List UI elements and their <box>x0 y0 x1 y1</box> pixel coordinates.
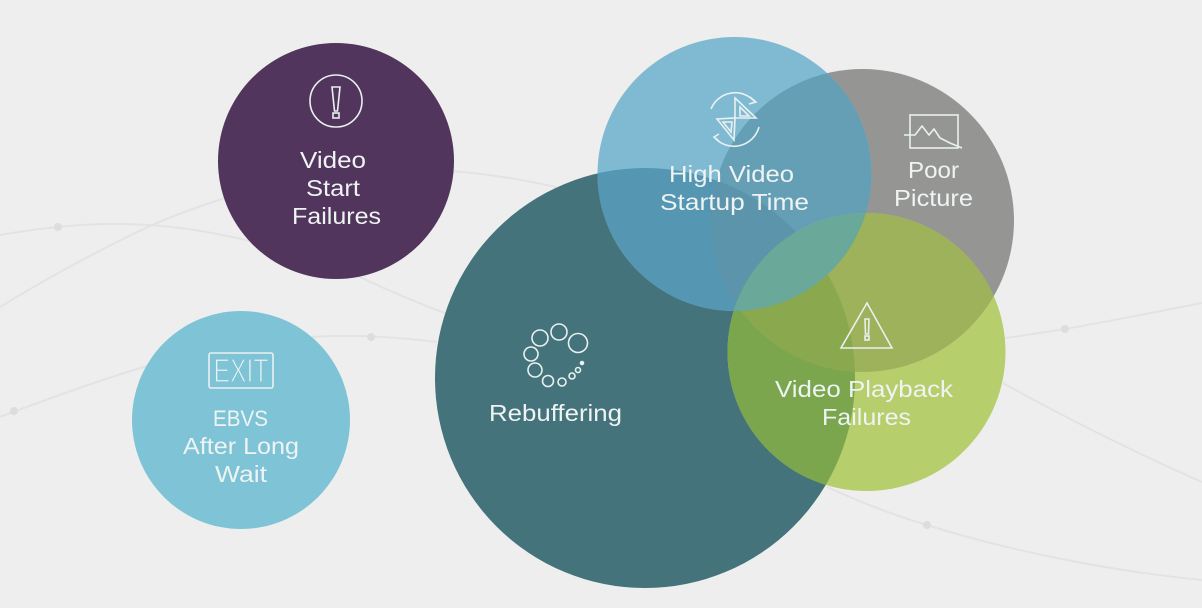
panel: poor picture <box>711 69 1014 372</box>
label: EBVS after long wait <box>183 406 299 487</box>
panel: video start failures <box>218 43 454 279</box>
label: video playback failures: Failures <box>822 404 911 430</box>
label: video playback failures: Video Playback <box>775 376 954 402</box>
label: EBVS after long wait: After Long <box>183 433 299 459</box>
label: poor picture: Picture <box>894 185 973 211</box>
panel: EBVS after long wait <box>132 311 350 529</box>
label: rebuffering: Rebuffering <box>489 400 622 426</box>
panel: high video startup time <box>598 37 872 311</box>
label: high video startup time: Startup Time <box>660 189 809 215</box>
icon: exit sign: EXIT <box>214 352 268 389</box>
label: poor picture <box>894 157 973 211</box>
label: EBVS after long wait: EBVS <box>213 406 268 431</box>
icon: line chart <box>904 115 962 148</box>
label: video start failures: Start <box>306 175 361 201</box>
label: high video startup time: High Video <box>669 161 794 187</box>
label: video start failures: Failures <box>292 203 381 229</box>
label: EBVS after long wait: Wait <box>215 461 268 487</box>
icon: exclamation in circle <box>310 75 362 127</box>
panel: rebuffering <box>435 168 855 588</box>
label: video start failures: Video <box>300 147 366 173</box>
label: video playback failures <box>775 376 954 430</box>
panel: video playback failures <box>728 213 1006 491</box>
icon: buffering spinner <box>524 324 588 386</box>
label: video start failures <box>292 147 381 229</box>
icon: hourglass with rotating arrows <box>711 93 759 146</box>
label: poor picture: Poor <box>908 157 959 183</box>
icon: warning triangle <box>841 303 892 348</box>
label: high video startup time <box>660 161 809 215</box>
background network lines <box>0 171 1202 580</box>
